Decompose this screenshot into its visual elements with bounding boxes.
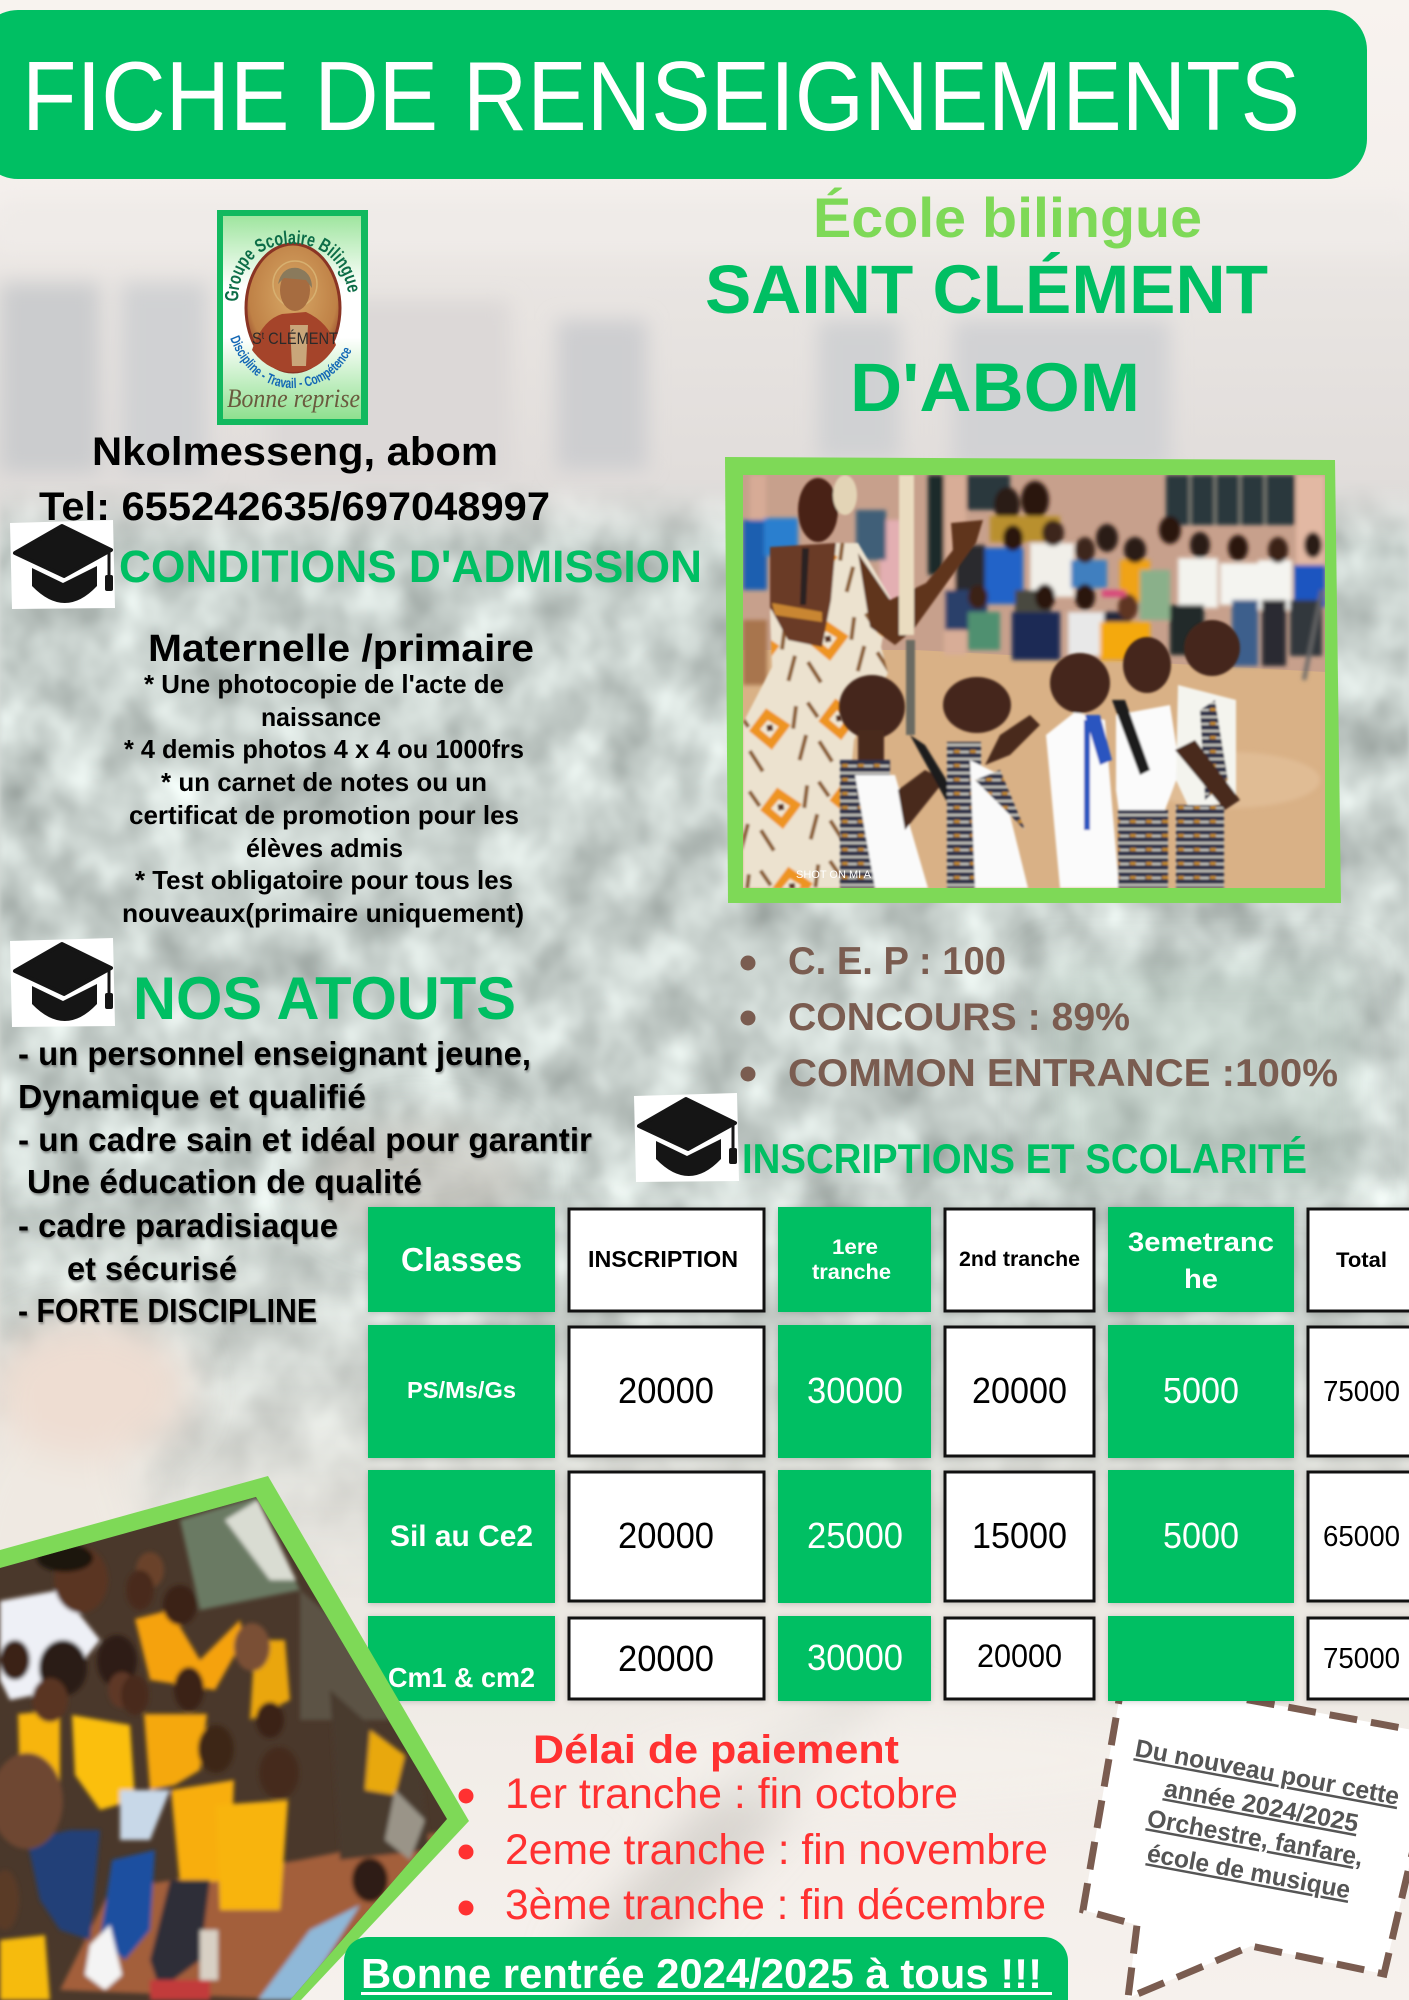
admission requirements text: * Une photocopie de l'acte de — [144, 669, 504, 699]
table header row: INSCRIPTION — [588, 1246, 738, 1272]
table row: PS/Ms/Gs: 5000 — [1163, 1370, 1239, 1411]
table row: Cm1 & cm2: 20000 — [618, 1638, 714, 1679]
callout: du nouveau: Du nouveau pour cette — [1133, 1734, 1402, 1811]
school name: D'ABOM — [850, 349, 1140, 426]
icon: graduation cap 2 — [10, 938, 115, 1027]
school logo: t — [262, 331, 264, 342]
address and phone: Nkolmesseng, abom — [92, 430, 498, 474]
table row: PS/Ms/Gs — [368, 1325, 1409, 1458]
school logo: Bonne reprise — [227, 384, 360, 413]
admission requirements text: nouveaux(primaire uniquement) — [122, 898, 524, 928]
strengths list: - FORTE DISCIPLINE — [18, 1292, 317, 1329]
woman conducting — [743, 475, 983, 888]
table row: Sil au Ce2: 5000 — [1163, 1515, 1239, 1556]
icon: graduation cap 3 — [634, 1093, 739, 1182]
callout: du nouveau — [1083, 1677, 1409, 1998]
payment deadline: 1er tranche : fin octobre — [505, 1770, 958, 1818]
photo: children in yellow uniforms, green pentagon frame — [0, 1476, 469, 2000]
table row: Sil au Ce2: 25000 — [807, 1515, 903, 1556]
table row: PS/Ms/Gs: 20000 — [972, 1370, 1067, 1411]
table header row: Total — [1336, 1249, 1387, 1272]
table header row: he — [1184, 1264, 1218, 1294]
table header row: tranche — [812, 1261, 891, 1284]
callout: du nouveau: année 2024/2025 — [1162, 1774, 1361, 1838]
table header row: 3emetranc — [1128, 1227, 1274, 1257]
table row: PS/Ms/Gs: 20000 — [618, 1370, 714, 1411]
admission requirements text: * un carnet de notes ou un — [161, 767, 487, 797]
class label: Cm1 & cm2: Cm1 & cm2 — [388, 1662, 535, 1693]
table row: Sil au Ce2: 15000 — [972, 1515, 1067, 1556]
heading: nos atouts: NOS ATOUTS — [133, 965, 516, 1032]
header banner — [0, 10, 1367, 179]
front row children — [968, 612, 1000, 650]
school logo: CLÉMENT — [264, 329, 338, 348]
heading: inscriptions et scolarité: INSCRIPTIONS ET SCOLARITÉ — [742, 1135, 1307, 1182]
payment deadline — [458, 1728, 1048, 1929]
table row: PS/Ms/Gs: 75000 — [1323, 1376, 1400, 1408]
table row: Cm1 & cm2: 30000 — [807, 1637, 903, 1678]
admission requirements text: * Test obligatoire pour tous les — [135, 865, 513, 895]
strengths list: Une éducation de qualité — [27, 1163, 422, 1200]
seated crowd — [743, 520, 767, 590]
admission requirements text: Maternelle /primaire — [148, 628, 534, 670]
table row: Cm1 & cm2: 20000 — [977, 1638, 1062, 1674]
admission requirements text — [122, 628, 534, 928]
heading: délai de paiement: Délai de paiement — [533, 1728, 899, 1772]
payment deadline: 3ème tranche : fin décembre — [505, 1881, 1046, 1929]
photo: children singing, green frame: SHOT ON MI A — [796, 869, 872, 881]
fee table — [368, 1207, 1409, 1701]
school results list: COMMON ENTRANCE :100% — [788, 1052, 1338, 1095]
school name: École bilingue — [813, 186, 1202, 249]
callout: du nouveau: école de musique — [1145, 1839, 1353, 1904]
callout: du nouveau: Orchestre, fanfare, — [1145, 1804, 1365, 1872]
table row: Sil au Ce2: 20000 — [618, 1515, 714, 1556]
five children — [839, 620, 1240, 888]
table row: Sil au Ce2: 65000 — [1323, 1521, 1400, 1553]
school results list: CONCOURS : 89% — [788, 996, 1130, 1039]
icon: graduation cap 1 — [10, 520, 115, 609]
strengths list: - cadre paradisiaque — [18, 1207, 338, 1244]
strengths list — [18, 1035, 592, 1329]
heading: conditions d'admission: CONDITIONS D'ADMISSION — [119, 541, 702, 592]
strengths list: - un cadre sain et idéal pour garantir — [18, 1121, 592, 1158]
admission requirements text: certificat de promotion pour les — [129, 800, 519, 830]
school logo: S — [252, 329, 263, 348]
strengths list: - un personnel enseignant jeune, — [18, 1035, 531, 1072]
banner: bonne rentrée: Bonne rentrée 2024/2025 à tous !!! — [361, 1950, 1042, 1997]
table row: Sil au Ce2: Sil au Ce2 — [390, 1520, 533, 1553]
admission requirements text: * 4 demis photos 4 x 4 ou 1000frs — [124, 734, 524, 764]
table header row: 2nd tranche — [959, 1248, 1080, 1271]
address and phone — [39, 430, 550, 529]
school name — [705, 186, 1268, 426]
school results list: C. E. P : 100 — [788, 940, 1006, 983]
school logo: Discipline - Travail - Compétence — [230, 335, 351, 388]
school logo: Groupe Scolaire Bilingue — [225, 230, 358, 301]
table row: PS/Ms/Gs: PS/Ms/Gs — [407, 1377, 516, 1403]
school name: SAINT CLÉMENT — [705, 251, 1268, 328]
title: FICHE DE RENSEIGNEMENTS — [22, 41, 1300, 151]
school results list — [740, 940, 1338, 1095]
strengths list: et sécurisé — [67, 1250, 237, 1287]
table row: Cm1 & cm2 — [368, 1616, 1409, 1701]
photo: children singing, green frame — [725, 457, 1341, 903]
admission requirements text: élèves admis — [246, 833, 403, 863]
table header row — [368, 1207, 1409, 1312]
strengths list: Dynamique et qualifié — [18, 1078, 366, 1115]
table row: Sil au Ce2 — [368, 1470, 1409, 1603]
table row: PS/Ms/Gs: 30000 — [807, 1370, 903, 1411]
table row: Cm1 & cm2: 75000 — [1323, 1643, 1400, 1675]
table header row: Classes — [401, 1241, 522, 1278]
admission requirements text: naissance — [261, 702, 381, 732]
payment deadline: 2eme tranche : fin novembre — [505, 1826, 1048, 1874]
address and phone: Tel: 655242635/697048997 — [39, 485, 550, 529]
table header row: 1ere — [832, 1236, 878, 1259]
school logo — [217, 210, 368, 425]
